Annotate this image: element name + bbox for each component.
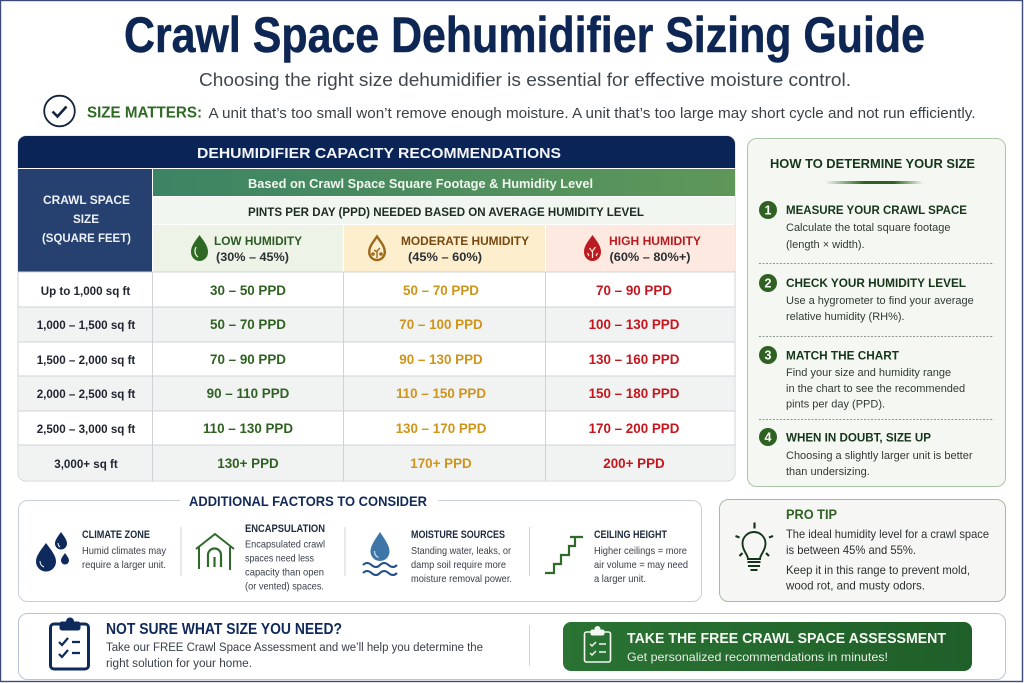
factor: ceiling height: a larger unit. <box>594 574 646 585</box>
factor: ceiling height: Higher ceilings = more <box>594 546 687 557</box>
table header <box>18 136 735 168</box>
high humidity header: (60% – 80%+) <box>610 250 690 264</box>
row: 2,000-2,500: 110 – 150 PPD <box>396 386 486 401</box>
row: 1,000-1,500 <box>37 317 680 332</box>
factor: ceiling height: CEILING HEIGHT <box>594 529 667 541</box>
factor: climate zone <box>36 529 167 571</box>
panel: pro tip <box>720 500 1006 602</box>
size matters callout <box>44 96 975 126</box>
factor: ceiling height: air volume = may need <box>594 560 688 571</box>
row: 2,000-2,500: 150 – 180 PPD <box>589 386 680 401</box>
step 4: than undersizing. <box>786 466 870 478</box>
cta text <box>106 640 483 670</box>
cta text: Take our FREE Crawl Space Assessment and we’ll help you determine the <box>106 640 483 654</box>
pro tip heading: PRO TIP <box>786 507 837 522</box>
step 3: in the chart to see the recommended <box>786 383 965 395</box>
row: 2,000-2,500: 2,000 – 2,500 sq ft <box>37 388 135 401</box>
table header: DEHUMIDIFIER CAPACITY RECOMMENDATIONS <box>197 145 561 162</box>
factor: moisture sources: Standing water, leaks, or <box>411 546 511 557</box>
icon: green drop <box>191 235 208 261</box>
factor: encapsulation: spaces need less <box>245 554 314 564</box>
step 1: (length × width). <box>786 239 865 251</box>
high humidity header <box>546 225 735 272</box>
size matters label: SIZE MATTERS: <box>87 104 202 122</box>
row: 2,000-2,500 <box>37 386 680 401</box>
row: 3,000+: 130+ PPD <box>217 456 279 471</box>
row: 2,000-2,500: 90 – 110 PPD <box>207 386 290 401</box>
cta text: right solution for your home. <box>106 656 252 670</box>
row: 2,500-3,000 <box>37 421 680 436</box>
pro tip text: wood rot, and musty odors. <box>785 578 925 592</box>
pro tip text: The ideal humidity level for a crawl space <box>786 527 989 541</box>
row: 2,500-3,000: 170 – 200 PPD <box>589 421 680 436</box>
step 2: 2 <box>765 276 772 290</box>
panel heading: HOW TO DETERMINE YOUR SIZE <box>770 156 975 171</box>
step 2: Use a hygrometer to find your average <box>786 295 974 307</box>
pro tip text <box>785 527 989 592</box>
panel: how to determine your size <box>748 138 1006 486</box>
row: up to 1,000: 30 – 50 PPD <box>210 283 286 298</box>
low humidity header <box>153 225 343 272</box>
table rows <box>18 272 735 481</box>
factor: encapsulation <box>196 523 325 592</box>
row: 1,500-2,000: 70 – 90 PPD <box>210 352 286 367</box>
crawl space size column header: (SQUARE FEET) <box>42 231 131 245</box>
icon: check circle <box>44 96 75 126</box>
step 3: 3 <box>765 348 772 362</box>
moderate humidity header: (45% – 60%) <box>408 250 482 264</box>
row: 3,000+ <box>54 456 665 471</box>
green subheader: Based on Crawl Space Square Footage & Humidity Level <box>248 177 593 191</box>
cta button <box>563 622 972 671</box>
row: 1,000-1,500: 70 – 100 PPD <box>399 317 483 332</box>
factor: climate zone: require a larger unit. <box>82 560 166 571</box>
crawl space size column header <box>18 169 152 272</box>
icon: white clipboard <box>584 626 610 662</box>
factor: encapsulation: Encapsulated crawl <box>245 540 325 550</box>
factor: moisture sources <box>363 529 512 585</box>
row: 1,500-2,000: 130 – 160 PPD <box>589 352 680 367</box>
step 4: 4 <box>765 430 772 444</box>
icon: stairs <box>545 537 583 573</box>
row: 2,500-3,000: 130 – 170 PPD <box>396 421 487 436</box>
icon: red drop <box>584 235 601 261</box>
step 3: pints per day (PPD). <box>786 398 885 410</box>
icon: house <box>196 534 234 570</box>
row: 2,500-3,000: 2,500 – 3,000 sq ft <box>37 423 135 436</box>
factor: ceiling height <box>545 529 688 585</box>
row: 3,000+: 3,000+ sq ft <box>54 458 118 471</box>
row: 3,000+: 170+ PPD <box>410 456 472 471</box>
crawl space size column header: CRAWL SPACE <box>43 193 130 207</box>
row: up to 1,000: Up to 1,000 sq ft <box>41 285 130 298</box>
crawl space size column header: SIZE <box>73 212 99 226</box>
step 1: 1 <box>765 204 772 218</box>
step 1 <box>759 201 967 251</box>
pints per day subheader <box>153 197 735 224</box>
size matters text: A unit that’s too small won’t remove enough moisture. A unit that’s too large may short cycle and not run efficiently. <box>208 106 975 122</box>
pro tip text: Keep it in this range to prevent mold, <box>786 563 970 577</box>
step 2 <box>759 274 974 323</box>
factor: encapsulation: capacity than open <box>245 568 324 578</box>
row: 1,000-1,500: 50 – 70 PPD <box>210 317 286 332</box>
panel: call to action <box>18 614 1006 680</box>
cta heading: NOT SURE WHAT SIZE YOU NEED? <box>106 621 342 638</box>
step 4 <box>759 428 973 478</box>
subtitle: Choosing the right size dehumidifier is essential for effective moisture control. <box>199 69 851 90</box>
row: up to 1,000: 70 – 90 PPD <box>596 283 672 298</box>
row: up to 1,000: 50 – 70 PPD <box>403 283 479 298</box>
step 3: MATCH THE CHART <box>786 348 899 362</box>
row: 1,500-2,000: 1,500 – 2,000 sq ft <box>37 354 135 367</box>
green subheader <box>153 169 735 196</box>
pro tip text: is between 45% and 55%. <box>786 543 916 557</box>
moderate humidity header <box>344 225 545 272</box>
panel: additional factors <box>18 494 702 602</box>
factor: encapsulation: (or vented) spaces. <box>245 582 324 592</box>
factor: moisture sources: MOISTURE SOURCES <box>411 529 505 541</box>
low humidity header: LOW HUMIDITY <box>214 235 302 248</box>
moderate humidity header: MODERATE HUMIDITY <box>401 235 529 248</box>
icon: light bulb <box>736 522 773 570</box>
icon: amber drop <box>369 236 385 260</box>
icon: rain drops <box>36 532 69 571</box>
factor: encapsulation: ENCAPSULATION <box>245 523 325 535</box>
pints per day subheader: PINTS PER DAY (PPD) NEEDED BASED ON AVERAGE HUMIDITY LEVEL <box>248 205 644 219</box>
row: 1,000-1,500: 1,000 – 1,500 sq ft <box>37 319 135 332</box>
step 4: WHEN IN DOUBT, SIZE UP <box>786 430 931 444</box>
low humidity header: (30% – 45%) <box>216 250 289 264</box>
factors heading: ADDITIONAL FACTORS TO CONSIDER <box>189 494 427 509</box>
icon: water drop with waves <box>363 532 397 575</box>
row: 1,500-2,000: 90 – 130 PPD <box>399 352 483 367</box>
step 4: Choosing a slightly larger unit is better <box>786 450 973 462</box>
row: up to 1,000 <box>41 283 672 298</box>
factor: climate zone: CLIMATE ZONE <box>82 529 150 541</box>
row: 3,000+: 200+ PPD <box>603 456 665 471</box>
step 1: Calculate the total square footage <box>786 222 951 234</box>
row: 1,000-1,500: 100 – 130 PPD <box>589 317 680 332</box>
factor: climate zone: Humid climates may <box>82 546 167 557</box>
cta button: TAKE THE FREE CRAWL SPACE ASSESSMENT <box>627 630 946 647</box>
step 3 <box>759 346 965 410</box>
high humidity header: HIGH HUMIDITY <box>609 235 701 248</box>
row: 1,500-2,000 <box>37 352 680 367</box>
step 1: MEASURE YOUR CRAWL SPACE <box>786 203 967 217</box>
factor: moisture sources: damp soil require more <box>411 560 506 571</box>
icon: clipboard <box>50 618 88 669</box>
step 2: relative humidity (RH%). <box>786 311 905 323</box>
factor: moisture sources: moisture removal power. <box>411 574 512 585</box>
step 2: CHECK YOUR HUMIDITY LEVEL <box>786 276 966 290</box>
cta button: Get personalized recommendations in minutes! <box>627 650 888 664</box>
row: 2,500-3,000: 110 – 130 PPD <box>203 421 293 436</box>
step 3: Find your size and humidity range <box>786 367 951 379</box>
panel: capacity table <box>18 136 735 481</box>
